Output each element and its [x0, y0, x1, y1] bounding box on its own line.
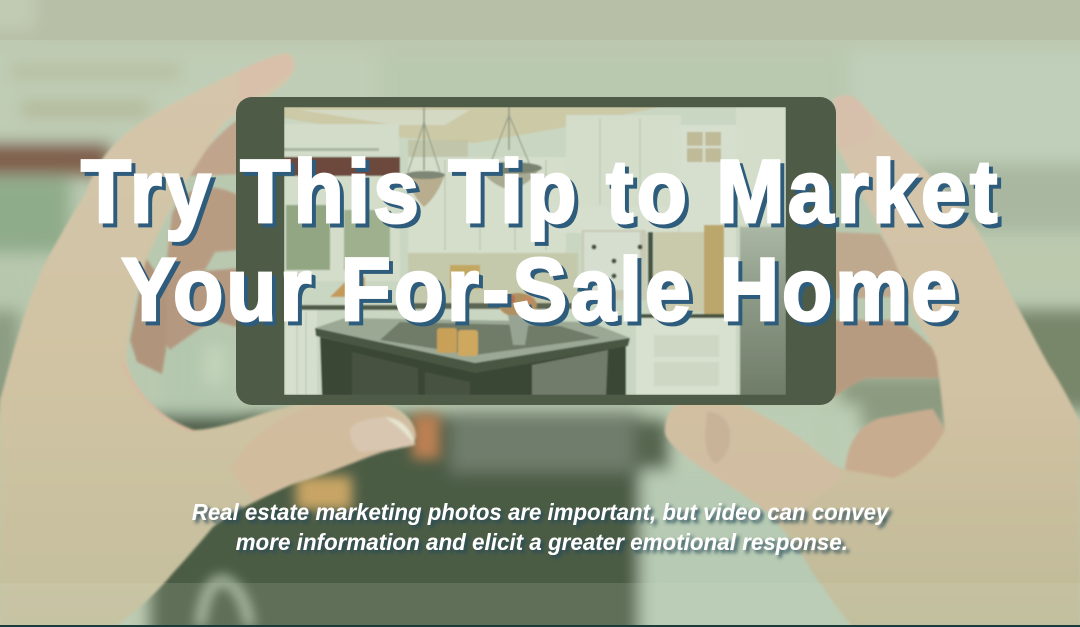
left hand — [0, 53, 416, 627]
bottom band — [0, 583, 1080, 627]
thumb tone — [230, 399, 416, 502]
nail rim — [385, 417, 415, 445]
thumbnail — [705, 412, 730, 464]
mugs — [437, 328, 457, 353]
subtitle — [192, 499, 890, 555]
thumb tone — [665, 401, 845, 520]
tip — [833, 95, 874, 150]
fingers behind phone — [826, 232, 945, 480]
pendant lamps — [424, 107, 509, 170]
orange towel — [330, 277, 365, 297]
top band — [0, 0, 1080, 40]
smartphone — [236, 97, 836, 405]
finger tip — [238, 55, 293, 105]
bottom edge line — [0, 625, 1080, 627]
title: Try This Tip to Market — [81, 143, 997, 242]
fruit bowl — [499, 293, 537, 317]
subtitle: more information and elicit a greater emotional response. — [236, 529, 848, 555]
title: Your For-Sale Home — [121, 241, 957, 340]
phone screen: sharp kitchen photo — [284, 107, 786, 395]
right hand — [665, 95, 1080, 627]
orange reflection — [350, 320, 388, 330]
title — [81, 143, 997, 340]
web crease — [122, 362, 195, 432]
fingers behind phone — [130, 118, 240, 374]
thumbnail — [350, 417, 415, 452]
subtitle: Real estate marketing photos are important, but video can convey — [192, 499, 890, 525]
phone body — [236, 97, 836, 405]
kitchen island — [315, 318, 630, 365]
